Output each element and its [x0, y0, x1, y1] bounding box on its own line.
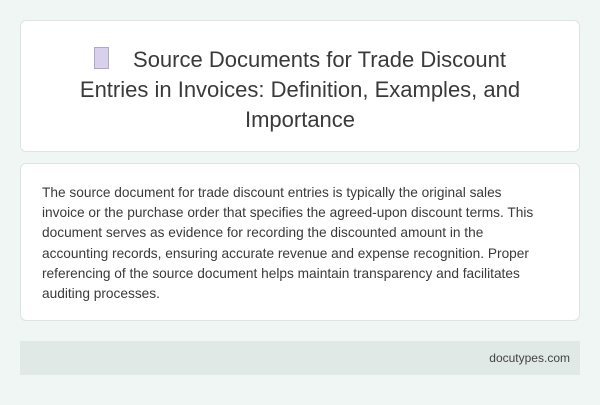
text block: The source document for trade discount entries is typically the original sales	[42, 185, 502, 200]
text block: auditing processes.	[42, 286, 160, 301]
footer	[20, 341, 580, 375]
text block: referencing of the source document helps maintain transparency and facilitates	[42, 266, 520, 281]
text block: invoice or the purchase order that specifies the agreed-upon discount terms. This	[42, 205, 533, 220]
title: Source Documents for Trade Discount	[133, 47, 506, 72]
panel: description	[20, 163, 580, 321]
footer text: docutypes.com	[489, 351, 570, 365]
title: Entries in Invoices: Definition, Examples, and	[80, 77, 520, 102]
text block	[42, 185, 533, 301]
title	[80, 47, 520, 132]
panel: title	[20, 20, 580, 152]
text block: accounting records, ensuring accurate revenue and expense recognition. Proper	[42, 246, 529, 261]
title: Importance	[245, 107, 355, 132]
icon: receipt	[94, 47, 109, 69]
text block: document serves as evidence for recording the discounted amount in the	[42, 225, 483, 240]
